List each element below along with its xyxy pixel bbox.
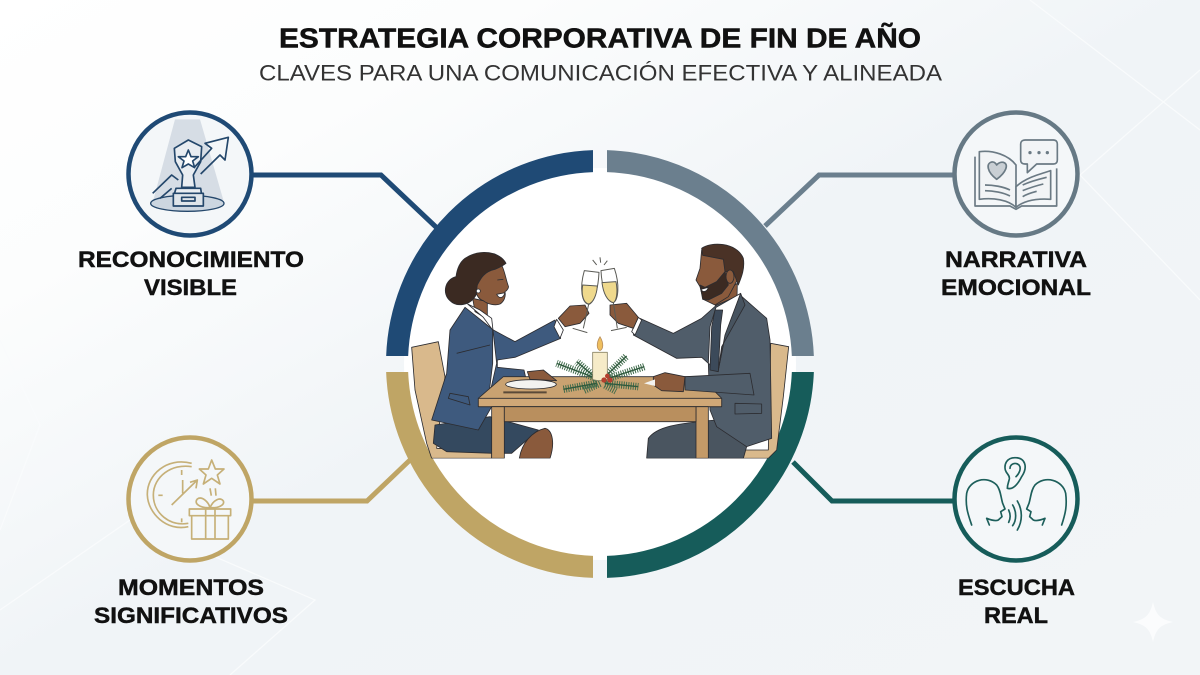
title: ESTRATEGIA CORPORATIVA DE FIN DE AÑO — [279, 22, 921, 54]
connector: reconocimiento — [253, 175, 437, 228]
ring segment: slate — [607, 150, 814, 356]
icon: clock, star and gift — [147, 460, 231, 539]
subtitle: CLAVES PARA UNA COMUNICACIÓN EFECTIVA Y ALINEADA — [259, 60, 942, 86]
icon group: escucha — [954, 438, 1078, 560]
label: reconocimiento visible: VISIBLE — [144, 275, 237, 300]
ring segment: gold — [386, 372, 593, 578]
label: momentos significativos — [94, 575, 288, 628]
label: momentos significativos: SIGNIFICATIVOS — [94, 603, 288, 628]
pine centerpiece and candle — [557, 337, 644, 391]
label: escucha real: ESCUCHA — [958, 575, 1075, 600]
champagne glasses — [573, 257, 627, 333]
label: narrativa emocional: EMOCIONAL — [941, 275, 1091, 300]
connector: momentos — [252, 460, 410, 501]
icon group: momentos — [128, 438, 252, 560]
hands and sleeves — [527, 303, 754, 395]
icon: two heads and ear — [966, 458, 1066, 530]
ring segment: blue — [386, 150, 593, 356]
label: escucha real — [958, 575, 1075, 628]
table — [478, 377, 722, 458]
ring segment: teal — [607, 372, 814, 578]
central white circle — [404, 168, 796, 560]
icon: open book with speech bubble — [975, 140, 1057, 209]
woman chair — [412, 342, 492, 458]
icon: trophy with arrow — [151, 119, 228, 211]
connector: escucha — [793, 462, 953, 501]
man — [632, 244, 772, 458]
label: escucha real: REAL — [984, 603, 1048, 628]
illustration: toast at the table — [412, 244, 789, 458]
icon group: reconocimiento — [128, 112, 252, 236]
label: reconocimiento visible — [78, 247, 304, 300]
woman — [432, 252, 563, 458]
connector: narrativa — [765, 175, 953, 226]
label: narrativa emocional — [941, 247, 1091, 300]
plate — [503, 379, 655, 392]
icon group: narrativa — [954, 112, 1078, 236]
icon: sparkle watermark — [1133, 602, 1173, 642]
label: reconocimiento visible: RECONOCIMIENTO — [78, 247, 304, 272]
label: momentos significativos: MOMENTOS — [118, 575, 264, 600]
label: narrativa emocional: NARRATIVA — [945, 247, 1087, 272]
man chair — [710, 343, 789, 458]
